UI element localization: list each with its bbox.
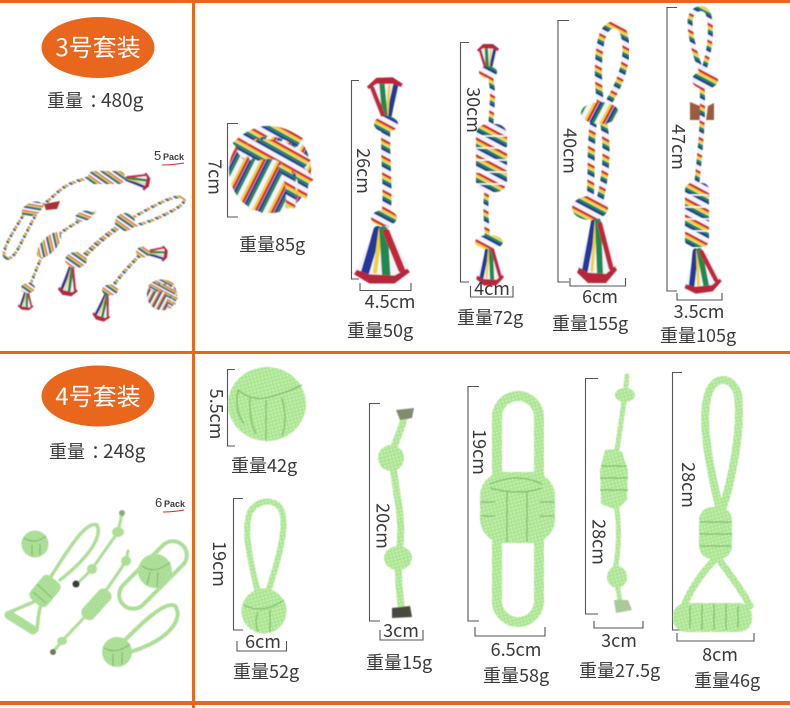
pack label: 6 pack [155, 495, 186, 512]
item: rainbow loop tug 40cm 155g: 40cm [558, 128, 584, 174]
total weight: set 4: 248g [103, 437, 146, 464]
total weight: set 3: 重量 [47, 87, 83, 113]
item: rainbow loop tug 40cm 155g: 6cm [582, 283, 618, 309]
item: green triangle tug 28cm 46g: 8cm [702, 641, 738, 667]
item: green double loop 19cm 58g: 重量58g [483, 662, 549, 688]
photo: five rainbow rope toys [4, 169, 184, 323]
item: rainbow ball 7cm 85g: 重量85g [239, 231, 305, 257]
item: green double loop 19cm 58g [467, 386, 555, 688]
item: green loop ball 19cm 52g: 重量52g [233, 658, 299, 684]
item: green barrel tug 28cm 27.5g: 重量27.5g [579, 657, 660, 683]
item: green ball 5.5cm 42g: 5.5cm [204, 389, 230, 439]
item: rainbow tug 26cm 50g: 重量50g [347, 317, 413, 343]
total weight: set 3: ： [89, 87, 107, 113]
panel: set 4 summary [9, 366, 193, 667]
item: rainbow tug 26cm 50g: 4.5cm [365, 288, 415, 314]
item: rainbow loop tug 40cm 155g: 重量155g [552, 310, 628, 336]
total weight: set 4: 重量 [49, 438, 85, 464]
pack label: 6 pack: 6 [155, 495, 162, 510]
pack label: 5 pack: Pack [163, 152, 185, 162]
item: rainbow long tug 47cm 105g: 47cm [666, 124, 692, 170]
item: green tug 20cm 15g: 20cm [370, 503, 396, 549]
pack label: 6 pack: Pack [164, 499, 186, 509]
pack label: 5 pack [154, 148, 185, 165]
item: green loop ball 19cm 52g [207, 498, 299, 684]
badge: set 4 [42, 366, 154, 426]
item: rainbow barrel tug 30cm 72g: 重量72g [457, 304, 523, 330]
item: green double loop 19cm 58g: 6.5cm [491, 636, 541, 662]
panel: set 3 summary [4, 17, 185, 323]
item: rainbow tug 26cm 50g [347, 77, 415, 343]
item: green tug 20cm 15g: 重量15g [366, 649, 432, 675]
item: green tug 20cm 15g [366, 404, 432, 675]
item: green barrel tug 28cm 27.5g: 3cm [601, 627, 637, 653]
item: green double loop 19cm 58g: 19cm [467, 429, 493, 475]
item: green ball 5.5cm 42g [204, 367, 306, 478]
item: green loop ball 19cm 52g: 19cm [207, 541, 233, 587]
panel: set 3 items [202, 8, 736, 348]
badge: set 4: 4号套装 [55, 377, 141, 412]
item: rainbow long tug 47cm 105g: 3.5cm [674, 298, 724, 324]
badge: set 3 [42, 17, 154, 78]
panel: set 4 items [204, 367, 760, 693]
item: green triangle tug 28cm 46g: 28cm [676, 462, 702, 508]
badge: set 3: 3号套装 [55, 28, 141, 63]
item: green triangle tug 28cm 46g: 重量46g [694, 667, 760, 693]
item: rainbow ball 7cm 85g [202, 124, 311, 257]
item: rainbow ball 7cm 85g: 7cm [202, 159, 228, 195]
pack label: 5 pack: 5 [154, 148, 161, 163]
item: rainbow barrel tug 30cm 72g: 30cm [461, 87, 487, 133]
total weight: set 3: 480g [101, 86, 144, 113]
item: green ball 5.5cm 42g: 重量42g [231, 452, 297, 478]
item: green loop ball 19cm 52g: 6cm [245, 628, 281, 654]
item: rainbow tug 26cm 50g: 26cm [351, 148, 377, 194]
item: green triangle tug 28cm 46g [672, 372, 760, 693]
item: rainbow loop tug 40cm 155g [552, 20, 628, 336]
photo: six green rope toys [9, 510, 193, 667]
item: green barrel tug 28cm 27.5g [579, 376, 660, 683]
item: green tug 20cm 15g: 3cm [383, 617, 419, 643]
item: rainbow long tug 47cm 105g [660, 8, 736, 348]
total weight: set 4: ： [91, 438, 109, 464]
item: green barrel tug 28cm 27.5g: 28cm [586, 519, 612, 565]
item: rainbow barrel tug 30cm 72g [457, 42, 523, 330]
item: rainbow long tug 47cm 105g: 重量105g [660, 322, 736, 348]
item: rainbow barrel tug 30cm 72g: 4cm [474, 275, 510, 301]
